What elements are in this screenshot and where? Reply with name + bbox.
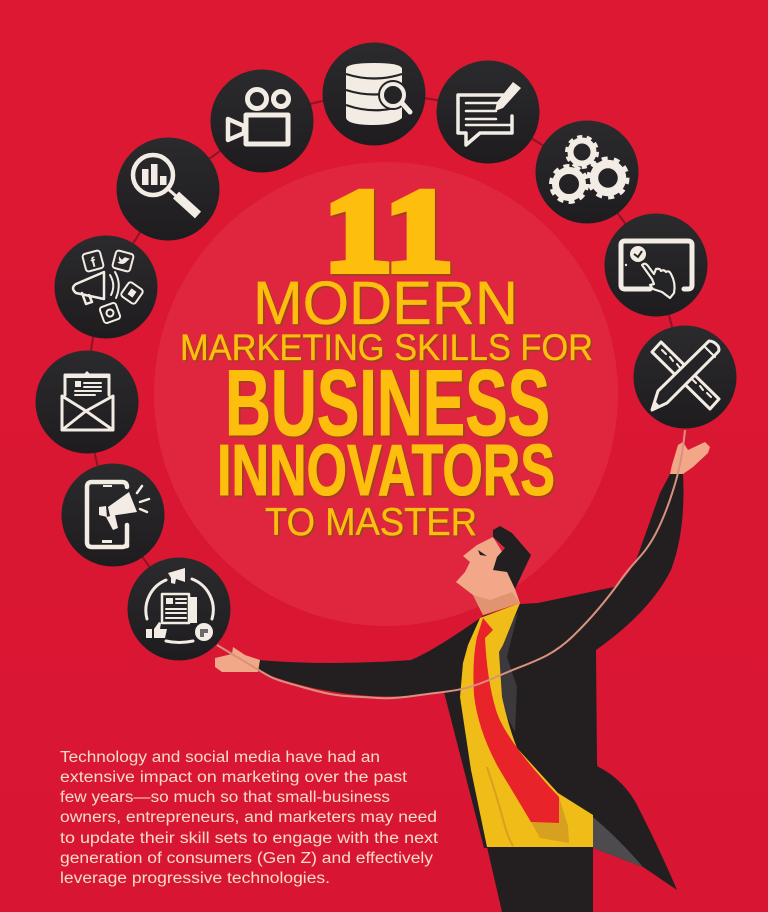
neck shadow <box>473 592 520 615</box>
title <box>180 167 593 544</box>
icon: analytics magnifier <box>116 138 220 240</box>
jacket tail <box>590 763 677 890</box>
string <box>217 430 685 698</box>
heading line: innovators: INNOVATORS <box>217 431 555 511</box>
icon: mobile marketing <box>62 464 164 566</box>
hand right <box>670 442 710 474</box>
intro paragraph: few years—so much so that small-business <box>60 789 390 806</box>
eye <box>478 550 487 556</box>
vest fold shading <box>531 797 569 843</box>
connector arc <box>87 94 685 609</box>
jacket body <box>444 474 684 848</box>
intro paragraph: Technology and social media have had an <box>60 749 380 766</box>
figure: businessman <box>215 430 710 912</box>
large title circle <box>154 162 618 626</box>
icon: social media megaphone <box>54 236 158 338</box>
intro paragraph: to update their skill sets to engage with the next <box>60 830 439 847</box>
heading line: marketing skills for: MARKETING SKILLS FOR <box>180 327 593 368</box>
left arm <box>258 616 483 696</box>
icon: video camera <box>210 70 314 172</box>
intro paragraph: generation of consumers (Gen Z) and effectively <box>60 850 433 867</box>
icon: content cycle <box>128 558 230 660</box>
hair <box>493 526 531 589</box>
intro paragraph <box>60 749 439 887</box>
icon: email envelope <box>36 350 138 454</box>
intro paragraph: extensive impact on marketing over the past <box>60 769 408 786</box>
vest <box>460 603 593 847</box>
icon: tablet touch <box>604 214 708 316</box>
icon: social media megaphone: f <box>89 254 98 270</box>
hand left <box>215 647 260 672</box>
numeral 11: 11 <box>324 167 453 296</box>
icon: content writing <box>436 60 540 164</box>
icon: ruler and pencil <box>634 326 736 428</box>
icon: gears <box>536 120 638 224</box>
pants <box>487 847 593 912</box>
heading line: to master: TO MASTER <box>265 501 477 544</box>
intro paragraph: leverage progressive technologies. <box>60 870 330 887</box>
intro paragraph: owners, entrepreneurs, and marketers may need <box>60 809 437 826</box>
lining <box>593 817 643 867</box>
heading line: business: BUSINESS <box>225 350 550 455</box>
neck and face <box>456 537 520 615</box>
vest fold <box>487 767 513 846</box>
icon: database search <box>322 42 426 146</box>
jacket inner shading <box>495 612 518 732</box>
heading line: modern: MODERN <box>253 269 518 337</box>
tie <box>473 618 559 823</box>
